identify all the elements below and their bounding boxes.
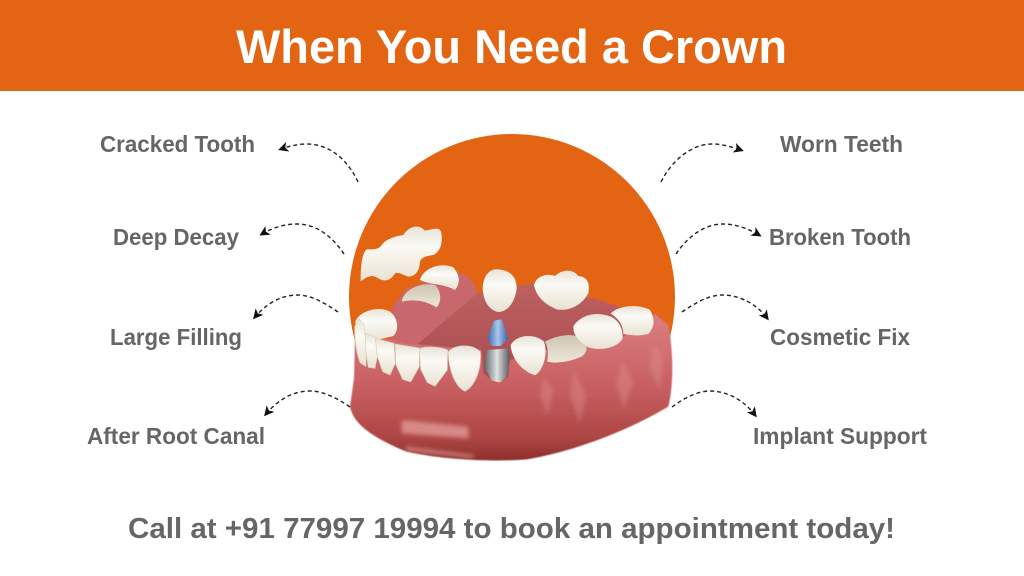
prepared tooth (545, 335, 587, 363)
gum body (350, 314, 672, 460)
back prepared teeth (420, 265, 459, 290)
title: When You Need a Crown (236, 20, 787, 73)
floating crown (483, 269, 517, 312)
floating bridge (361, 227, 442, 282)
arrow: implant support (672, 391, 755, 415)
right molars (573, 314, 623, 349)
back left gum ridge (390, 273, 477, 345)
implant abutment (487, 319, 508, 346)
arrow: broken tooth (676, 224, 759, 254)
call to action: Call at +91 77997 19994 to book an appointment today! (128, 513, 895, 545)
arrow: cosmetic fix (682, 295, 767, 318)
orange circle backdrop (349, 134, 675, 384)
arrow: after root canal (266, 391, 350, 414)
label: large filling: Large Filling (110, 324, 242, 350)
label: deep decay: Deep Decay (113, 224, 239, 250)
header banner (0, 0, 1024, 91)
floating molar crown (534, 271, 589, 310)
front teeth row (355, 318, 481, 391)
label: after root canal: After Root Canal (87, 423, 265, 449)
label: broken tooth: Broken Tooth (769, 224, 911, 250)
arrow: cracked tooth (281, 144, 358, 182)
implant screw (484, 348, 510, 383)
label: worn teeth: Worn Teeth (780, 131, 903, 157)
arrow: deep decay (262, 224, 344, 254)
gum texture (540, 343, 663, 423)
tooth right of implant (511, 336, 546, 375)
illustration: lower jaw with crowns and implant (350, 227, 672, 460)
mouth floor (393, 283, 660, 383)
arrow: worn teeth (661, 144, 741, 182)
arrow: large filling (255, 295, 338, 317)
back left molar (355, 309, 397, 342)
label: cosmetic fix: Cosmetic Fix (770, 324, 910, 350)
label: cracked tooth: Cracked Tooth (100, 131, 255, 157)
gum highlight (402, 420, 473, 458)
label: implant support: Implant Support (753, 423, 927, 449)
